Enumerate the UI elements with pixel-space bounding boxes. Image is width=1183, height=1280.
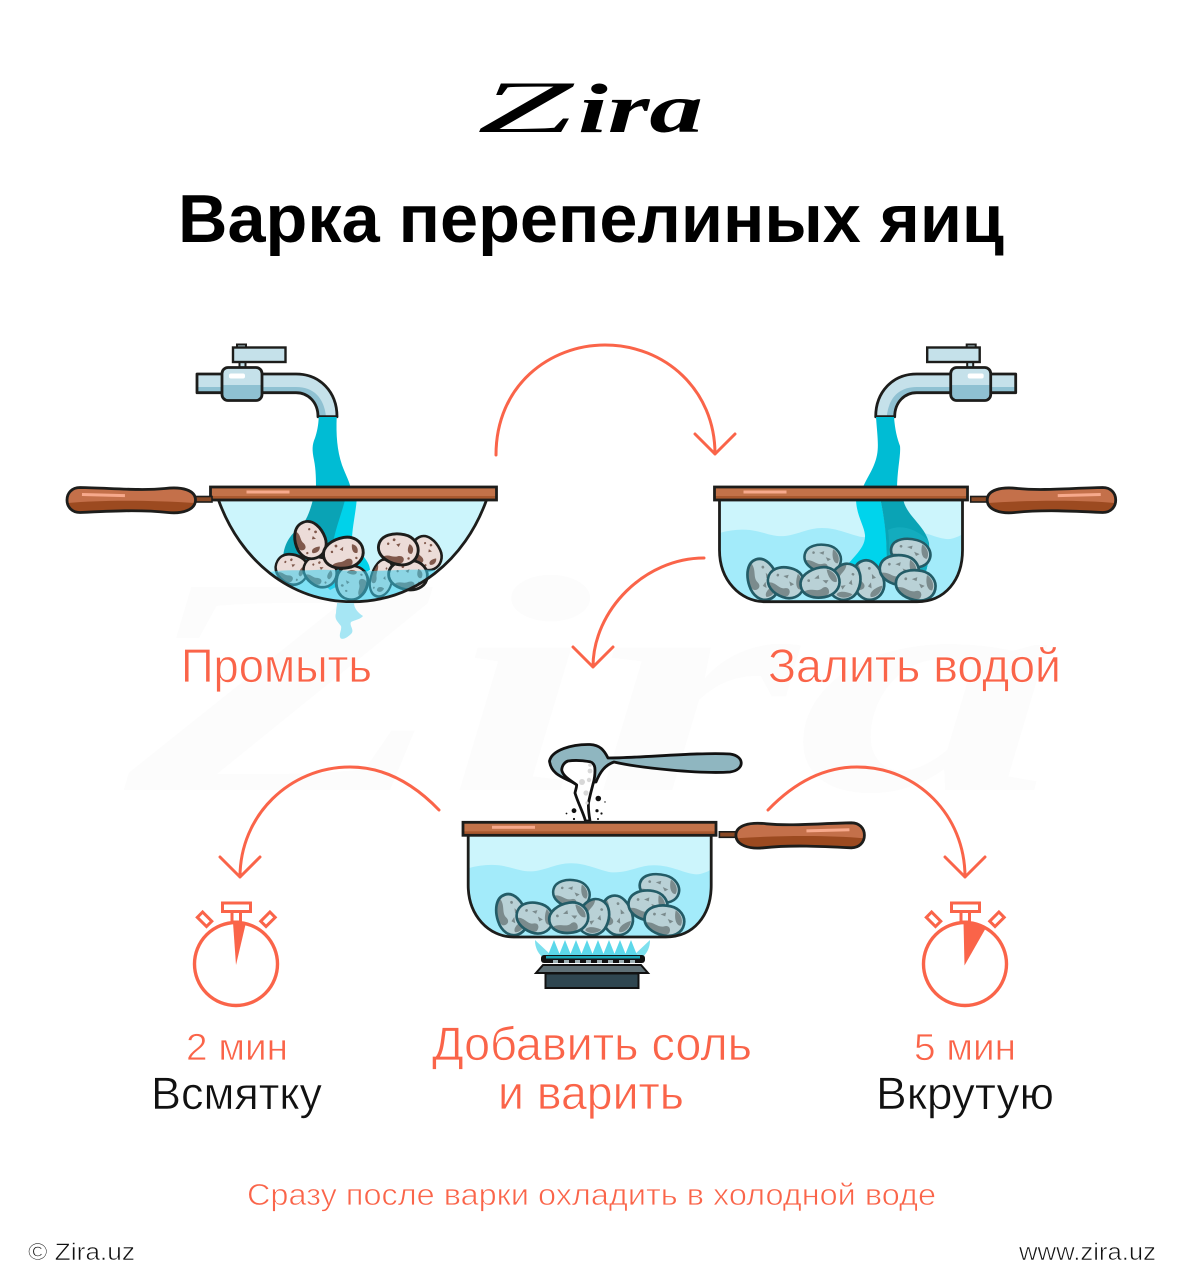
background watermark: Zira [117,515,1060,858]
arrow: fill to boil [573,558,704,667]
note: cool after boiling: Сразу после варки охладить в холодной воде [247,1177,936,1212]
bowl outline [218,500,486,602]
label: rinse: Промыть [181,639,372,692]
icon: faucet [197,344,337,417]
icon: eggs in water [491,869,687,940]
text: add salt and boil [432,1017,752,1119]
text: add salt and boil: Добавить соль [432,1017,752,1070]
logo: ira [578,71,703,148]
icon: gas burner [536,955,648,988]
stopwatch: 2 minutes [194,903,278,1006]
icon: brown speckled eggs [270,517,446,603]
pot outline [720,500,962,602]
icon: pot rim [463,822,716,835]
panel: rinse eggs in a colander [67,344,496,639]
icon: drip below the bowl [335,603,363,639]
icon: water stream [843,417,929,575]
icon: spoon [550,744,741,783]
stopwatch hand [233,922,246,965]
text: soft boiled: Всмятку [151,1068,322,1119]
arrow: rinse to fill [496,345,735,455]
icon: pot rim [714,487,968,500]
title: Варка перепелиных яиц [178,181,1004,257]
panel: fill with water [714,344,1116,605]
bowl [218,500,486,602]
icon: faucet [876,344,1016,417]
icon: water stream [283,417,370,590]
stopwatch: 5 minutes [924,903,1006,1006]
pot outline [468,835,711,937]
text: 5 min: 5 мин [914,1027,1016,1069]
label: fill with water: Залить водой [768,639,1061,692]
icon: eggs in water [742,534,938,605]
pot body with water [720,500,962,602]
footer: website: www.zira.uz [1018,1239,1156,1266]
pot body with water [468,835,711,937]
footer: copyright: © Zira.uz [28,1239,135,1266]
logo: Z [477,67,575,149]
panel: add salt and boil [463,744,864,988]
stopwatch sector hand [964,922,985,966]
text: 2 min: 2 мин [186,1027,288,1069]
water pool in the bowl [270,570,435,600]
icon: colander rim [210,487,496,500]
icon: pot handle [719,823,864,848]
icon: colander handle [67,488,212,513]
text: add salt and boil: и варить [498,1066,684,1119]
icon: burner flames [535,940,650,961]
text: hard boiled: Вкрутую [876,1068,1054,1119]
icon: pot handle [971,488,1116,513]
arrow: boil to soft [220,767,439,877]
icon: falling salt [562,760,606,821]
arrow: boil to hard [768,767,985,877]
